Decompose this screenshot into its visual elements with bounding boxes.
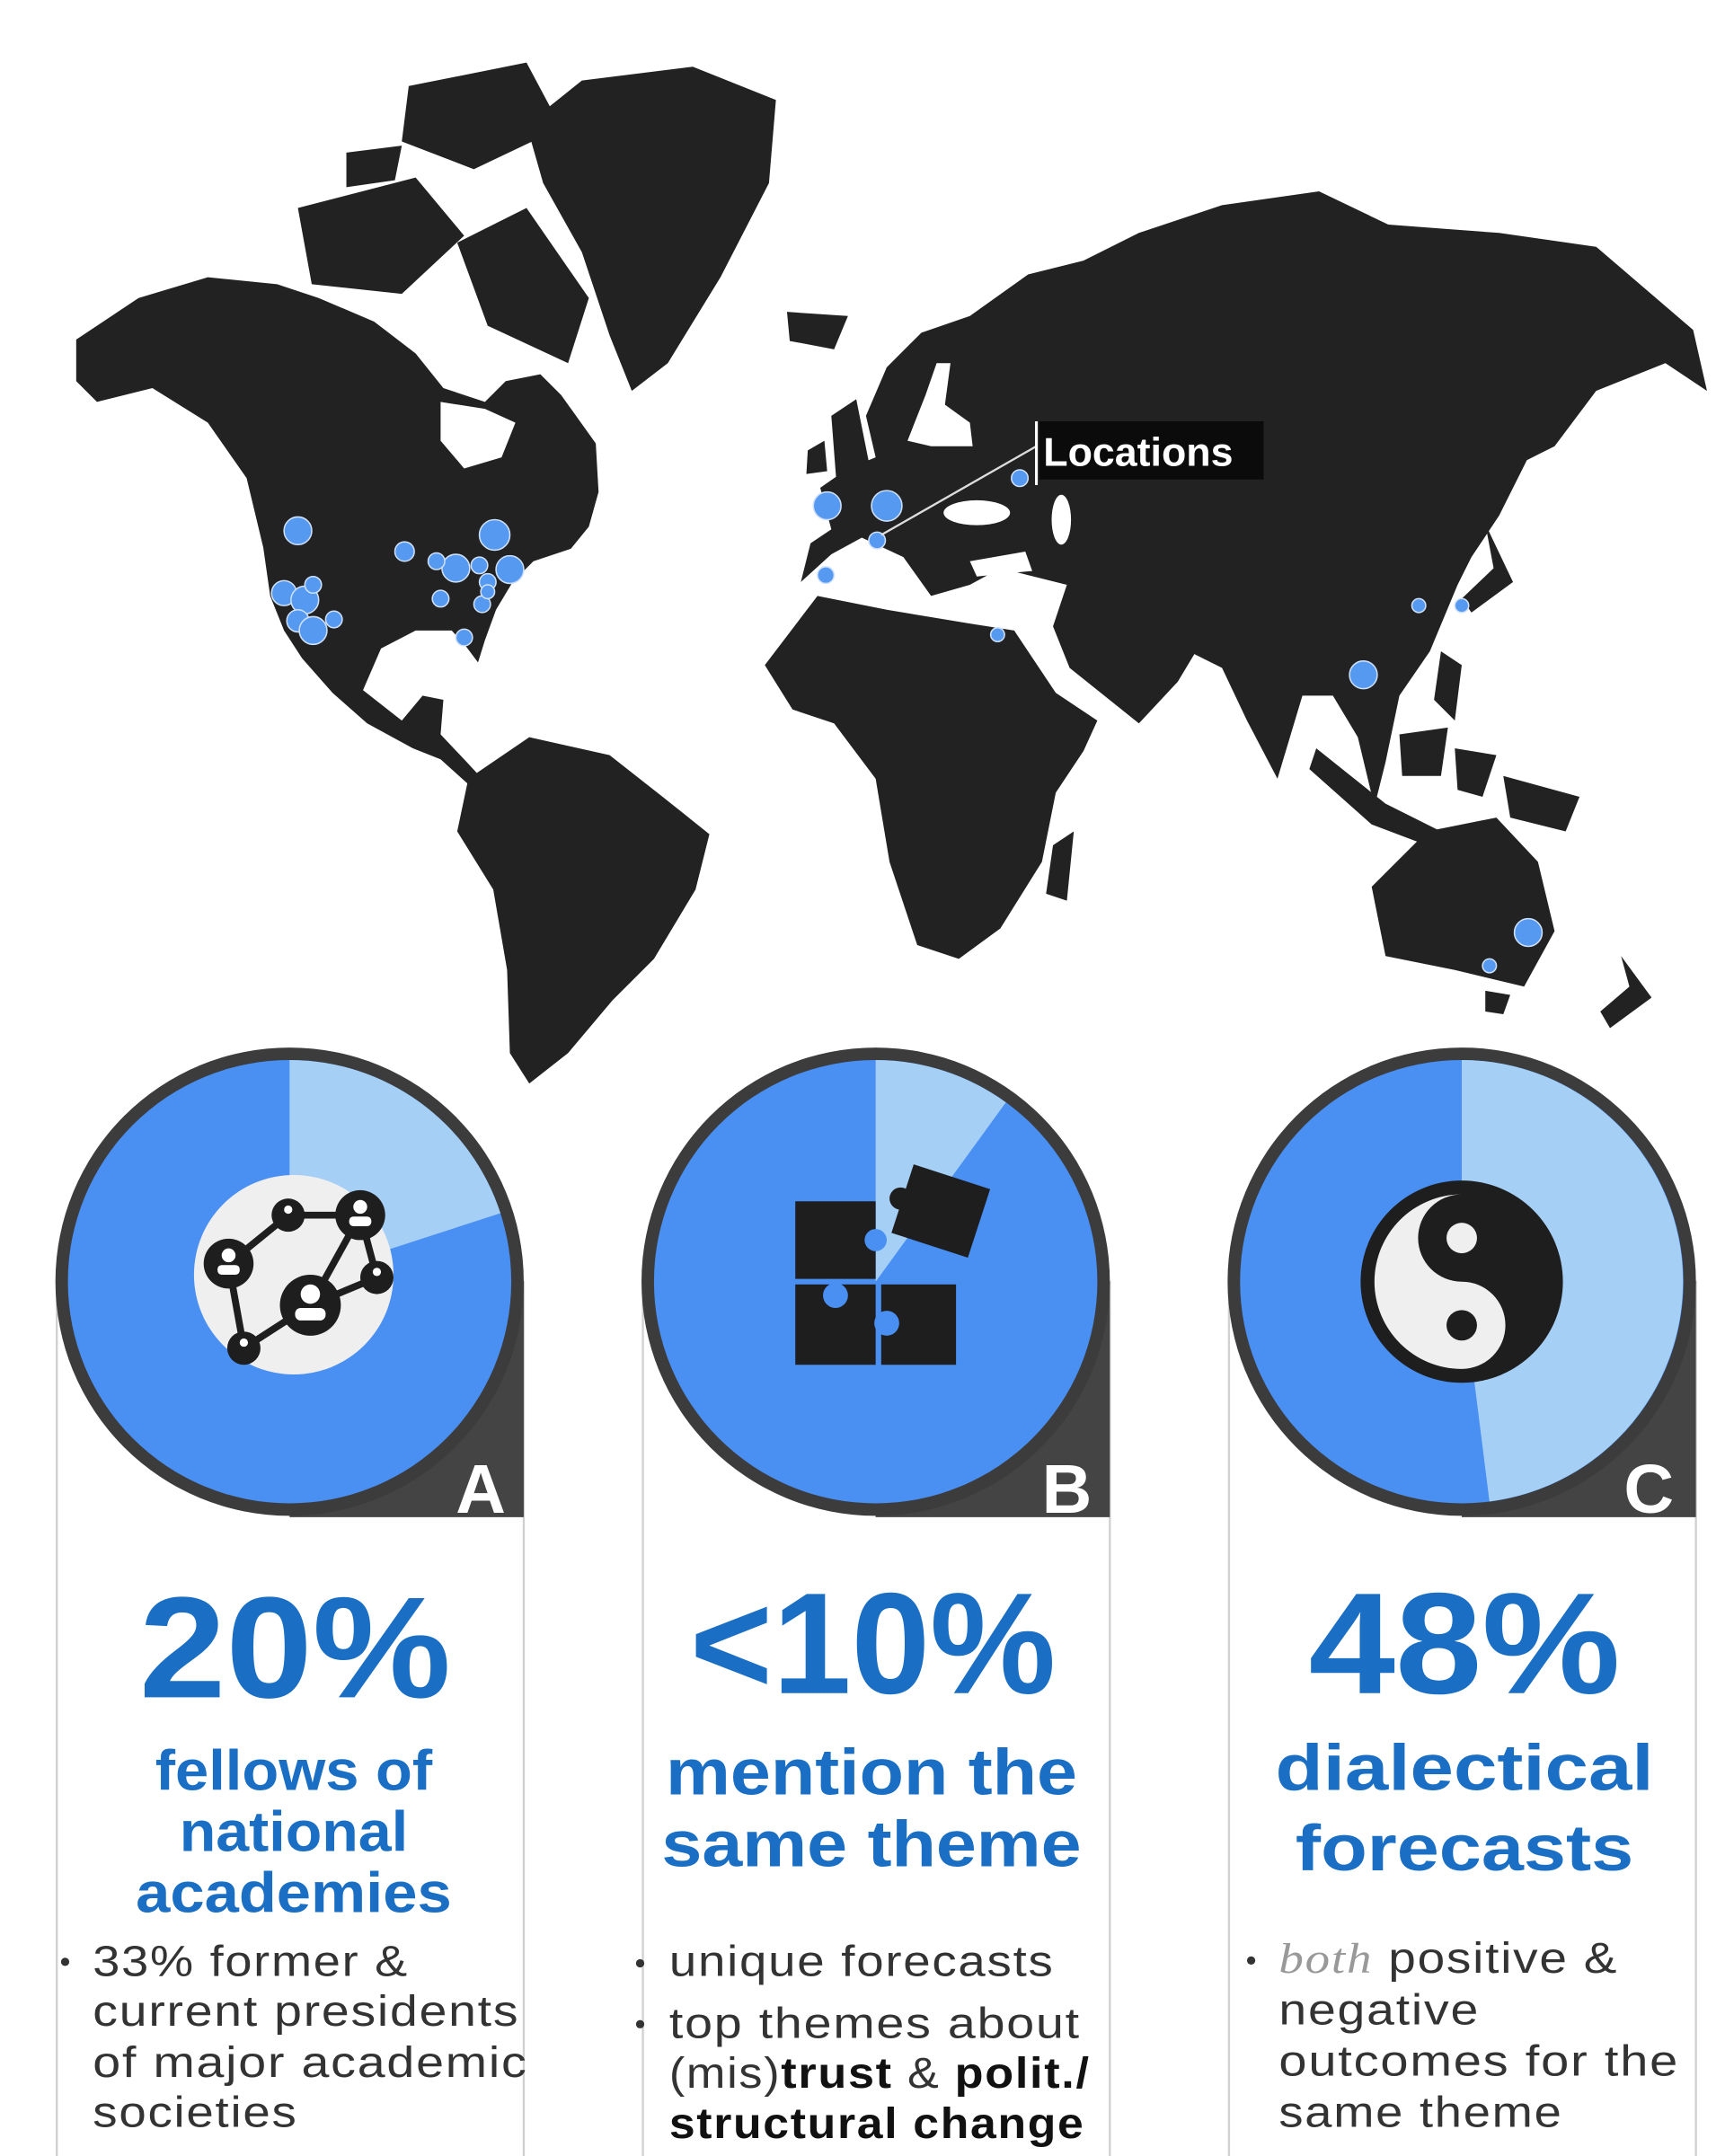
- bullets C: same theme: [1278, 2089, 1563, 2136]
- uk and ireland: [831, 399, 870, 488]
- eurasia: [801, 191, 1707, 807]
- stat C: 48%: [1309, 1563, 1621, 1724]
- donut A: [68, 1060, 511, 1503]
- callout: Locations: Locations: [1043, 430, 1233, 474]
- bullets B: top themes about: [669, 2001, 1081, 2048]
- bullets B: unique forecasts: [669, 1938, 1055, 1985]
- bullets B: (mis) trust & polit./: [669, 2050, 1091, 2098]
- icon: network: [194, 1175, 394, 1374]
- panel C: [1227, 1047, 1696, 2156]
- north america: [76, 278, 598, 784]
- islands se asia: [1309, 748, 1441, 848]
- label C: C: [1623, 1451, 1674, 1528]
- subhead A: [136, 1740, 452, 1924]
- australia: [1372, 817, 1554, 986]
- subhead B: same theme: [661, 1807, 1082, 1880]
- subhead A: fellows of: [155, 1740, 433, 1803]
- location dots: [271, 470, 1542, 973]
- bullets B: [636, 1938, 1091, 2148]
- bullets A: societies: [93, 2089, 298, 2136]
- stat A: 20%: [139, 1567, 451, 1727]
- africa: [765, 596, 1097, 959]
- greenland: [526, 66, 776, 391]
- panel A: [56, 1047, 528, 2156]
- donut C: [1240, 1060, 1684, 1503]
- bullets A: current presidents: [93, 1988, 519, 2036]
- bullets C: [1247, 1935, 1679, 2136]
- subhead B: [661, 1736, 1082, 1880]
- bullets B: structural change: [669, 2100, 1085, 2148]
- icon: yin-yang: [1360, 1180, 1563, 1383]
- bullets C: both positive &: [1278, 1935, 1618, 1983]
- subhead C: forecasts: [1296, 1812, 1633, 1885]
- new zealand: [1600, 956, 1651, 1028]
- donut B: [654, 1060, 1097, 1503]
- madagascar: [1046, 831, 1074, 901]
- label A: A: [456, 1451, 506, 1528]
- callout: Locations: [881, 421, 1263, 535]
- icon: puzzle: [795, 1164, 990, 1365]
- bullets A: [61, 1938, 528, 2136]
- iceland: [787, 312, 848, 349]
- world map: [76, 63, 1707, 1083]
- south america: [457, 738, 710, 1083]
- label B: B: [1042, 1451, 1092, 1528]
- subhead A: academies: [136, 1861, 452, 1924]
- panel B: [636, 1047, 1110, 2156]
- subhead A: national: [180, 1801, 408, 1864]
- inland water: [440, 363, 1071, 577]
- bullets C: negative: [1278, 1986, 1480, 2034]
- japan: [1462, 524, 1513, 613]
- stat B: <10%: [690, 1563, 1056, 1724]
- subhead C: [1276, 1732, 1654, 1885]
- bullets A: 33% former &: [93, 1938, 409, 1985]
- bullets C: outcomes for the: [1278, 2037, 1679, 2085]
- subhead B: mention the: [666, 1736, 1077, 1808]
- canadian arctic islands: [298, 178, 464, 294]
- subhead C: dialectical: [1276, 1732, 1654, 1805]
- bullets A: of major academic: [93, 2039, 528, 2087]
